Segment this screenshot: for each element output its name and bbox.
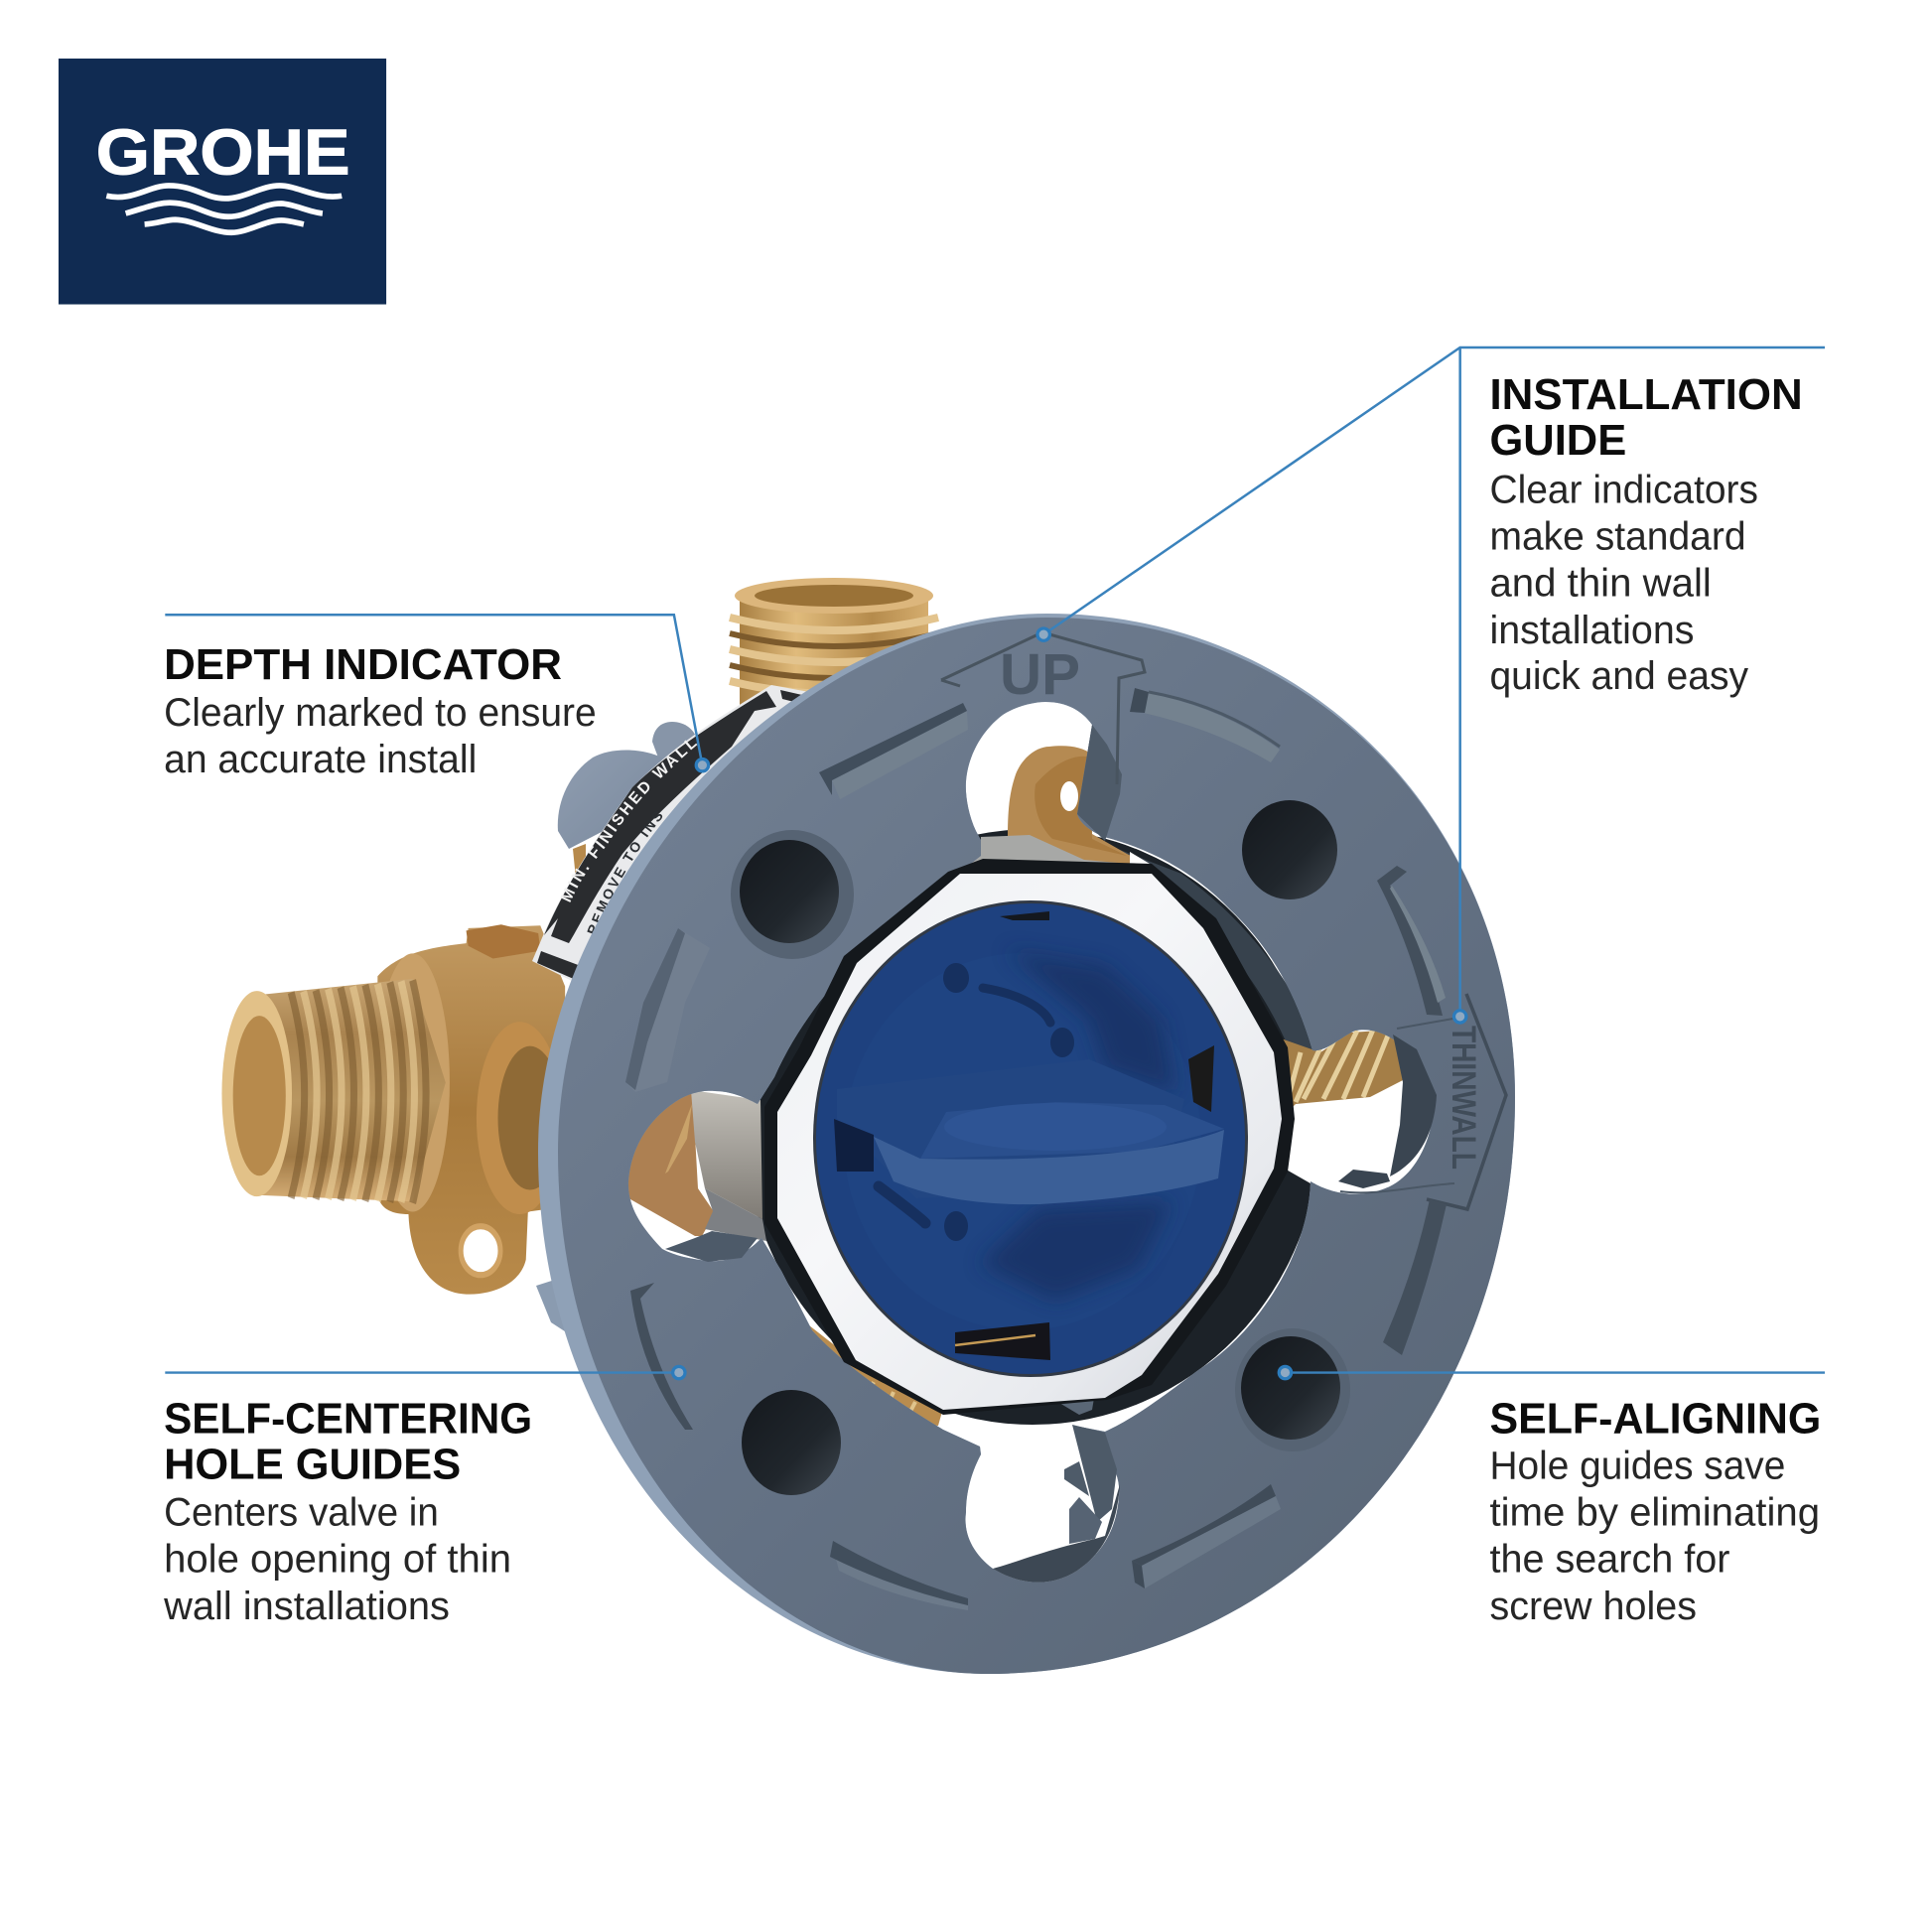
- description: [1489, 468, 1758, 698]
- brass lug seen through top opening: [1008, 746, 1233, 965]
- UP text: UP: [1000, 642, 1080, 707]
- heading: GUIDE: [1489, 417, 1626, 465]
- description: installations: [1489, 609, 1694, 652]
- description: [163, 1490, 511, 1628]
- leader lines: [1043, 347, 1825, 1017]
- description: wall installations: [163, 1585, 450, 1628]
- strip label: remove to install: REMOVE TO INS: [587, 814, 663, 933]
- raised rib marks: [625, 688, 1447, 1610]
- description: make standard: [1489, 515, 1746, 559]
- screw hole: bottom right: [1235, 1328, 1350, 1451]
- heading: [1489, 371, 1803, 465]
- upper-right interior wall: [1092, 839, 1320, 1054]
- leader line: [165, 615, 702, 765]
- description: [1489, 1444, 1820, 1628]
- heading: [164, 1395, 532, 1488]
- cap handle: [834, 1102, 1224, 1204]
- brass thread seen through right opening: [1264, 1030, 1405, 1117]
- black gasket: [764, 859, 1295, 1415]
- heading: DEPTH INDICATOR: [164, 641, 562, 689]
- small tab at lower left of disc: [536, 1279, 571, 1335]
- callout: depth indicator: [164, 615, 709, 781]
- callout: installation guide: [1037, 347, 1825, 1023]
- mounting disc: [538, 614, 1515, 1674]
- description: screw holes: [1489, 1585, 1697, 1628]
- interior seen through left opening: [616, 1082, 766, 1241]
- description: the search for: [1489, 1538, 1729, 1582]
- brass thread seen at bottom: [809, 1325, 943, 1426]
- description: Hole guides save: [1489, 1444, 1785, 1487]
- description: Clear indicators: [1489, 468, 1758, 511]
- right opening inner wall: [1338, 1035, 1437, 1188]
- THINWALL text: THINWALL: [1445, 1026, 1482, 1170]
- heading: SELF-ALIGNING: [1489, 1395, 1821, 1443]
- heading: SELF-CENTERING: [164, 1395, 532, 1443]
- description: [164, 691, 597, 781]
- UP arrow marking: [941, 632, 1145, 784]
- logo wordmark: GROHE: [96, 117, 349, 189]
- leader dot: [696, 759, 709, 771]
- bottom opening tabs: [993, 1398, 1120, 1583]
- left brass fitting: [221, 924, 565, 1295]
- description: an accurate install: [164, 738, 477, 781]
- logo waves: [106, 186, 342, 232]
- valve product illustration: [182, 538, 1515, 1674]
- description: quick and easy: [1489, 654, 1748, 698]
- leader line: [165, 1372, 679, 1374]
- grey plastic stub: [558, 722, 698, 879]
- description: hole opening of thin: [164, 1538, 511, 1582]
- satin metal collar: [958, 835, 1152, 874]
- central cavity behind nut: [745, 829, 1320, 1425]
- cap shadows: [980, 950, 1174, 1301]
- leader dot: [673, 1366, 685, 1379]
- screw hole: bottom left: [742, 1390, 841, 1495]
- screw hole: top left: [731, 830, 854, 959]
- heading: HOLE GUIDES: [164, 1441, 461, 1488]
- leader dot: up: [1037, 628, 1049, 640]
- callout: self-aligning: [1279, 1366, 1825, 1628]
- depth indicator strip: [532, 685, 806, 981]
- left opening lower lip: [665, 1231, 758, 1262]
- description: and thin wall: [1489, 562, 1712, 606]
- cap plate: [837, 1059, 1184, 1198]
- white gap in right opening: [1261, 1072, 1415, 1191]
- leader line: [1285, 1372, 1825, 1374]
- description: Centers valve in: [164, 1490, 439, 1534]
- description: time by eliminating: [1489, 1490, 1820, 1534]
- leader dot: thinwall: [1453, 1011, 1466, 1023]
- top opening arm wall: [1077, 725, 1122, 841]
- strip label: min finished wall: MIN. FINISHED WALL: [560, 741, 697, 902]
- cap dimples: [879, 963, 1074, 1241]
- leader dot: [1279, 1366, 1292, 1379]
- blue cartridge cap: [813, 900, 1248, 1377]
- cap notches: [955, 911, 1214, 1360]
- THINWALL arrow marking: [1340, 994, 1506, 1209]
- chrome hex nut: [777, 874, 1282, 1410]
- logo: GROHE: [59, 59, 386, 305]
- top brass fitting: [730, 578, 938, 715]
- description: Clearly marked to ensure: [164, 691, 597, 735]
- callout: self-centering hole guides: [163, 1366, 685, 1628]
- heading: INSTALLATION: [1489, 371, 1803, 419]
- screw hole: top right: [1242, 800, 1337, 899]
